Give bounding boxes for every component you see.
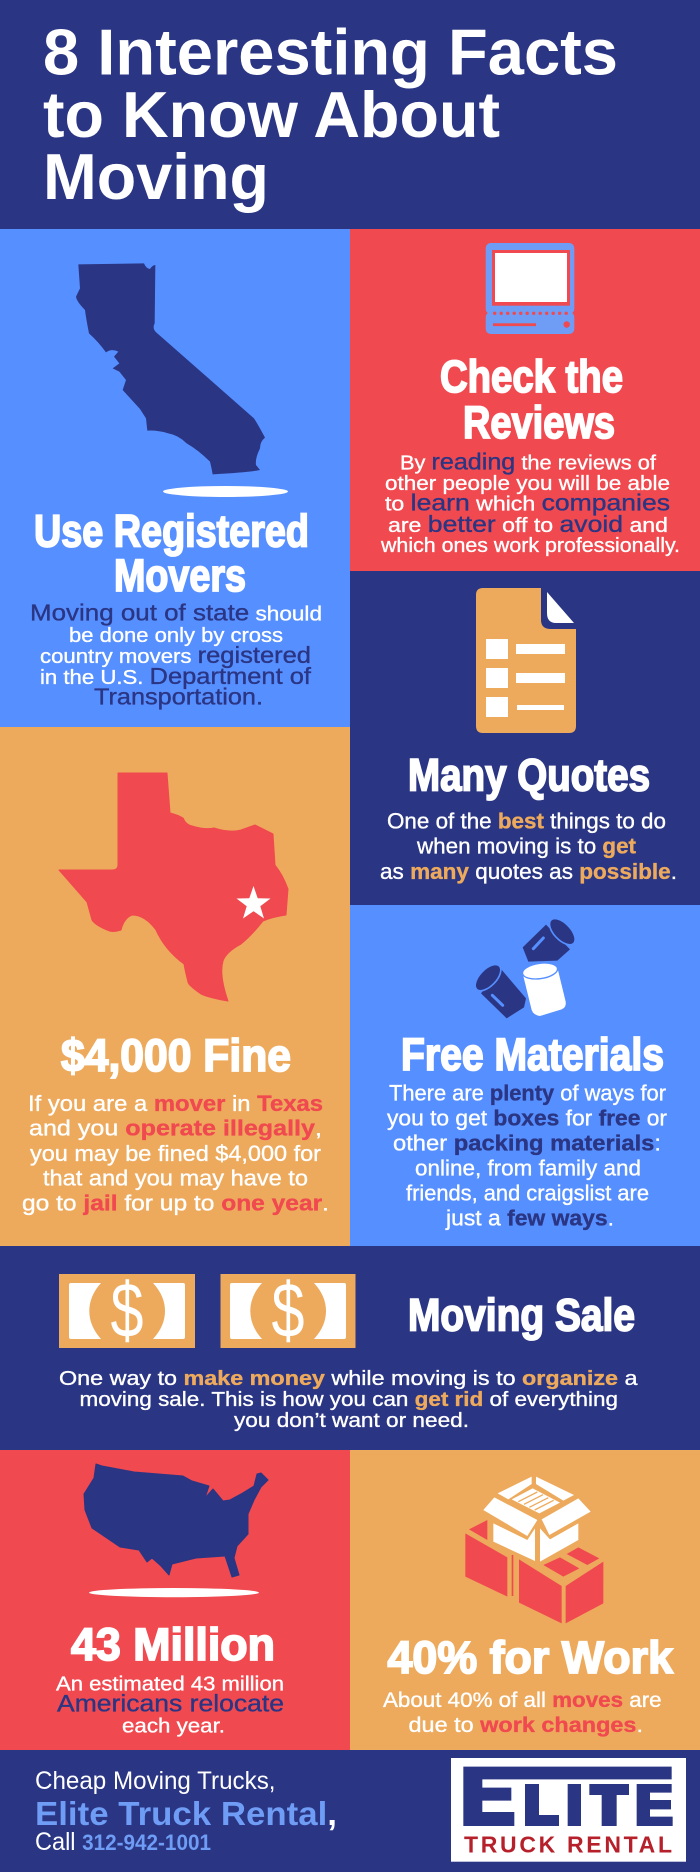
icon: dollar bill left: $	[110, 1266, 144, 1354]
text: $4,000 fine body: you may be fined $4,000 for	[30, 1141, 321, 1166]
text: use registered movers body: country movers registered	[40, 642, 311, 668]
text: free materials body: just a few ways.	[445, 1206, 614, 1230]
text: $4,000 fine body: go to jail for up to one year .	[22, 1191, 329, 1216]
text: many quotes body: when moving is to get	[416, 834, 637, 859]
text: 40% for work body: About 40% of all moves are	[383, 1689, 662, 1712]
text: free materials body: other packing materials :	[393, 1130, 661, 1156]
title: 8 Interesting Facts	[43, 16, 618, 89]
icon: California shadow	[163, 486, 288, 497]
heading: use registered movers: Movers	[114, 550, 246, 601]
text: use registered movers body: Transportation.	[94, 684, 263, 710]
panel: footer	[0, 1750, 700, 1872]
logo: Elite Truck Rental	[451, 1758, 686, 1862]
icon: California map	[76, 263, 265, 474]
text: free materials body: friends, and craigslist are	[406, 1181, 649, 1206]
heading: 43 million: 43 Million	[71, 1619, 275, 1670]
text: free materials body	[387, 1080, 667, 1230]
heading: use registered movers: Use Registered	[34, 506, 309, 556]
text: $4,000 fine body: that and you may have to	[43, 1166, 308, 1191]
text: footer contact	[35, 1767, 337, 1856]
icon: dollar bill right: $	[272, 1266, 304, 1354]
text: $4,000 fine body: and you operate illegally ,	[29, 1116, 322, 1141]
icon: USA map	[84, 1464, 268, 1577]
text: many quotes body: as many quotes as possible.	[380, 859, 677, 884]
text: use registered movers body: Moving out of state should	[30, 600, 322, 626]
heading: $4,000 fine: $4,000 Fine	[61, 1030, 291, 1081]
text: free materials body: online, from family and	[415, 1156, 641, 1181]
text: 43 million body: Americans relocate	[57, 1691, 284, 1718]
heading: check the reviews	[440, 351, 623, 448]
title: to Know About	[43, 78, 500, 151]
text: 43 million body	[56, 1674, 284, 1738]
text: moving sale body: moving sale. This is how you can get rid of everything	[80, 1389, 618, 1411]
text: 40% for work body	[383, 1689, 662, 1737]
text: footer contact: Elite Truck Rental ,	[35, 1795, 337, 1832]
text: 40% for work body: due to work changes .	[408, 1714, 643, 1737]
panel: 43 million	[0, 1450, 350, 1750]
panel: free materials	[350, 905, 700, 1246]
text: use registered movers body: in the U.S. Department of	[40, 663, 312, 689]
text: check the reviews body	[380, 449, 680, 557]
icon: dollar bill left	[59, 1266, 195, 1354]
icon: USA shadow	[89, 1588, 259, 1597]
text: footer contact: Cheap Moving Trucks,	[35, 1767, 276, 1795]
text: footer contact: Call 312-942-1001	[35, 1828, 211, 1856]
icon: computer	[486, 243, 574, 334]
text: $4,000 fine body	[22, 1091, 329, 1216]
text: 43 million body: each year.	[122, 1716, 225, 1738]
heading: check the reviews: Reviews	[463, 397, 615, 448]
text: check the reviews body: which ones work professionally.	[380, 535, 680, 557]
logo: Elite Truck Rental: TRUCK RENTAL	[464, 1832, 672, 1858]
text: free materials body: you to get boxes for free or	[387, 1106, 667, 1131]
text: check the reviews body: other people you will be able	[385, 473, 670, 495]
panel: many quotes	[350, 571, 700, 905]
heading: free materials: Free Materials	[401, 1029, 664, 1080]
panel: $4,000 fine	[0, 727, 350, 1246]
panel: header	[0, 0, 700, 229]
icon: Texas map	[59, 773, 288, 1001]
heading: 40% for work: 40% for Work	[388, 1632, 674, 1683]
text: many quotes body: One of the best things to do	[387, 808, 666, 834]
icon: star	[236, 886, 270, 918]
heading: moving sale: Moving Sale	[408, 1290, 635, 1341]
heading: use registered movers	[34, 506, 309, 601]
icon: moving boxes	[465, 1477, 603, 1623]
text: check the reviews body: to learn which companies	[385, 490, 670, 516]
text: $4,000 fine body: If you are a mover in Texas	[28, 1091, 323, 1116]
text: free materials body: There are plenty of ways for	[389, 1080, 666, 1106]
text: use registered movers body	[30, 600, 322, 710]
text: check the reviews body: By reading the reviews of	[400, 449, 656, 475]
panel: 40% for work	[350, 1450, 700, 1750]
icon: document	[476, 588, 576, 733]
text: moving sale body	[59, 1368, 639, 1432]
text: 43 million body: An estimated 43 million	[56, 1674, 284, 1696]
heading: check the reviews: Check the	[440, 351, 623, 402]
title	[43, 16, 618, 213]
heading: many quotes: Many Quotes	[408, 750, 650, 801]
icon: cups	[471, 914, 580, 1018]
text: many quotes body	[380, 808, 677, 884]
text: check the reviews body: are better off to avoid and	[388, 511, 668, 537]
panel: use registered movers	[0, 229, 350, 727]
text: use registered movers body: be done only by cross	[69, 625, 283, 647]
text: moving sale body: One way to make money while moving is to organize a	[59, 1368, 639, 1390]
title: Moving	[43, 140, 269, 213]
panel: moving sale	[0, 1246, 700, 1450]
icon: dollar bill right	[220, 1266, 356, 1354]
text: moving sale body: you don’t want or need.	[234, 1410, 469, 1432]
panel: check the reviews	[350, 229, 700, 571]
